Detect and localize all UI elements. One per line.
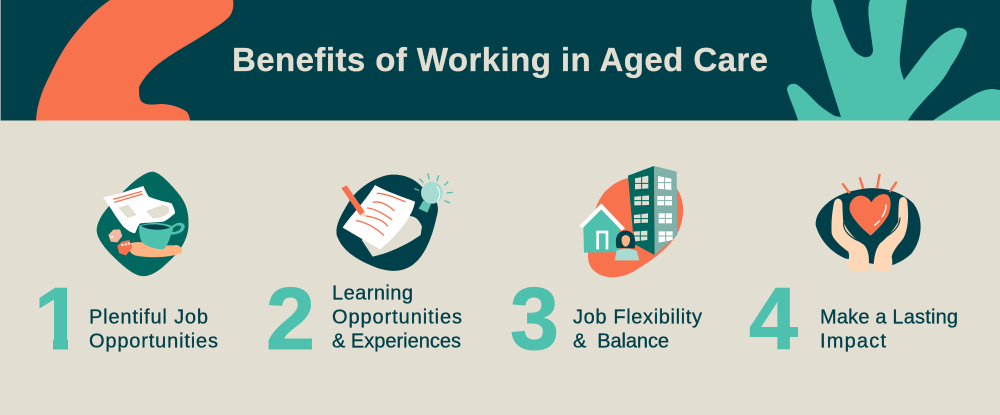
item 4 [749,269,958,368]
orange blob [588,176,683,277]
newspaper details [113,191,169,218]
heart highlight [875,205,886,225]
header band [0,0,1000,120]
label 2 [332,282,462,352]
icon: hands holding a heart [816,174,921,272]
label 1: Plentiful Job [89,306,208,328]
person [615,231,639,260]
number 4: 4 [749,269,798,368]
finger creases [844,218,900,242]
rays [842,174,897,193]
label 1: Opportunities [89,330,218,352]
handwriting lines [357,193,405,235]
item 1 [40,288,218,352]
label 2: & Experiences [332,330,461,352]
paper sheet [343,185,415,249]
label 4: Make a Lasting [820,306,958,328]
light bulb [414,173,453,213]
coffee cup [139,223,185,249]
paper shadow [362,216,422,257]
left hand [831,199,869,272]
icon: house, apartment block and person [579,166,683,277]
number 2: 2 [266,269,315,368]
icon: notes with pencil and light bulb [336,173,453,271]
windows [633,176,649,241]
hexagon blocks [108,229,132,255]
label 4 [820,306,958,352]
item 2 [266,269,462,368]
building dark side [628,166,655,255]
dark blob [336,175,438,271]
orange brush shape [36,0,233,120]
label 4: Impact [820,330,886,352]
newspaper [103,186,175,233]
dark blob [816,188,921,267]
heart [850,194,891,236]
icon: newspaper and coffee cup [97,172,189,276]
label 3: & Balance [573,330,669,352]
item 3 [510,269,702,368]
hand [128,242,182,257]
pencil [341,185,367,217]
number 3: 3 [510,269,559,368]
building light side [654,166,677,255]
label 3 [573,306,702,352]
title: Benefits of Working in Aged Care [232,41,768,78]
dark green blob [97,172,189,276]
house [579,203,625,253]
label 1 [89,306,218,352]
label 2: Learning [332,282,413,304]
number 1: 1 [34,269,83,368]
teal leaf shape [787,0,1000,120]
label 2: Opportunities [332,306,462,328]
right hand [873,197,908,272]
label 3: Job Flexibility [573,306,702,328]
